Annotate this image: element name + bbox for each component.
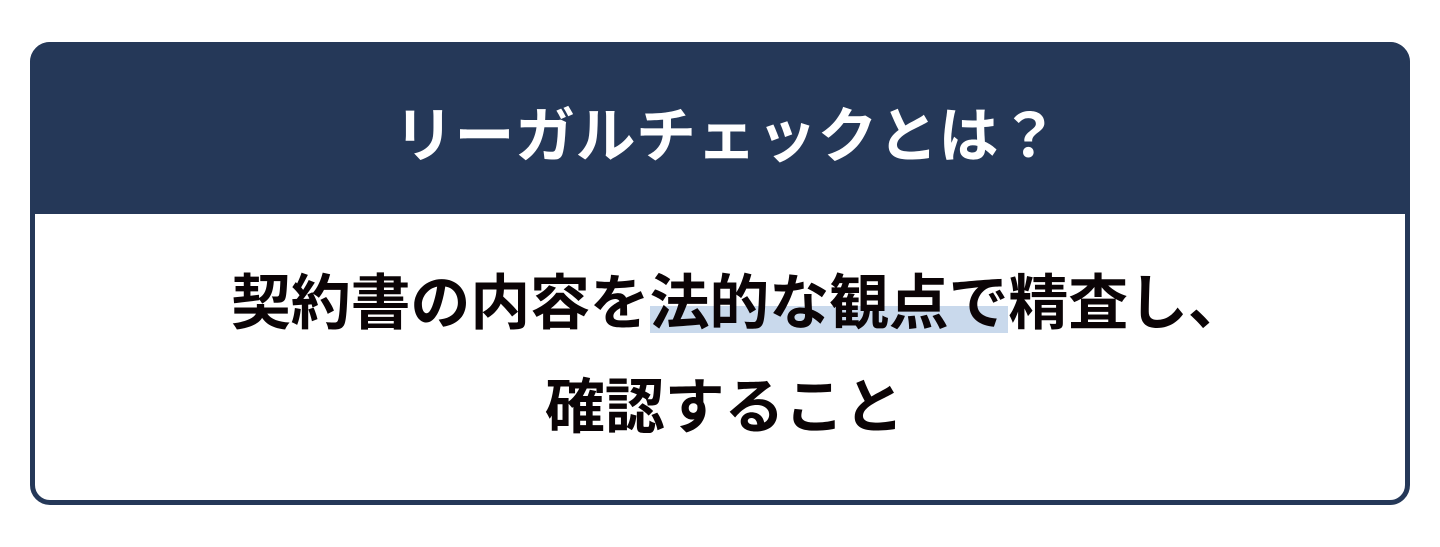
title: リーガルチェックとは？ bbox=[394, 103, 1060, 170]
panel: header band bbox=[30, 42, 1410, 214]
highlight marker bbox=[650, 306, 1008, 333]
text block: line 1: 契約書の内容を法的な観点で精査し、 bbox=[231, 270, 1248, 337]
text block: line 2: 確認すること bbox=[545, 374, 904, 441]
